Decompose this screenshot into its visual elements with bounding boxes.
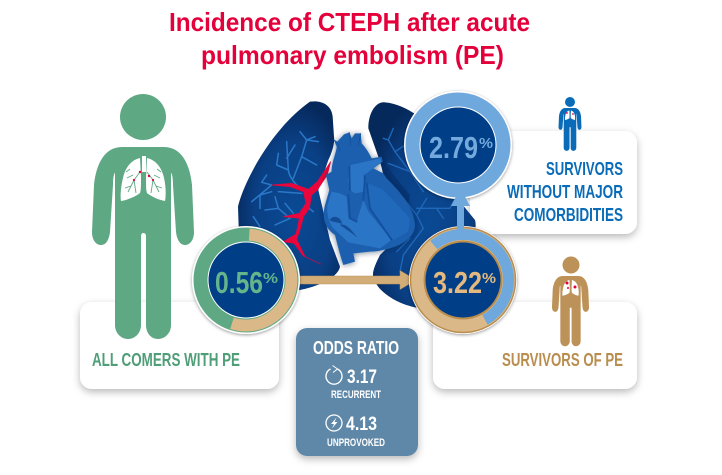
icon: unprovoked (326, 415, 342, 431)
ring: 0.56%: % (263, 270, 278, 287)
arrow: tan, all comers to survivors (296, 270, 416, 290)
panel: odds ratio (296, 328, 418, 456)
red clot vessels (272, 162, 331, 264)
panel: odds ratio: 3.17 (347, 367, 377, 388)
icon: recurrent (326, 366, 342, 384)
ring: 3.22%: % (482, 270, 496, 287)
arrow: blue, survivors to no comorbidities (451, 188, 470, 238)
ring: 0.56%: 0.56 (215, 265, 263, 300)
ring: 3.22% (409, 226, 517, 334)
title: pulmonary embolism (PE) (201, 40, 504, 70)
title (169, 7, 530, 70)
ring: 2.79% (404, 91, 512, 199)
icon: small tan person (552, 256, 589, 346)
title: Incidence of CTEPH after acute (169, 7, 530, 37)
panel: odds ratio: UNPROVOKED (327, 437, 385, 449)
panel: survivors without major comorbidities: WITHOUT MAJOR (507, 182, 623, 202)
ring: 0.56% (192, 226, 300, 334)
panel: odds ratio: RECURRENT (331, 389, 381, 401)
panel: survivors of PE: SURVIVORS OF PE (502, 350, 623, 370)
panel: odds ratio: ODDS RATIO (313, 338, 399, 358)
panel: all comers with PE (80, 302, 279, 389)
icon: large green person with lungs (92, 94, 194, 339)
ring: 2.79%: % (479, 135, 493, 152)
panel: all comers with PE: ALL COMERS WITH PE (92, 350, 240, 370)
panel: survivors of PE (433, 302, 637, 389)
left lung (238, 101, 340, 291)
panel: odds ratio: 4.13 (346, 414, 377, 435)
panel: survivors without major comorbidities: SURVIVORS (546, 159, 623, 179)
left lung vessels (252, 132, 318, 227)
ring: 2.79%: 2.79 (429, 130, 478, 165)
panel: survivors without major comorbidities (470, 131, 637, 234)
illustration: lungs and heart (238, 101, 476, 308)
ring: 3.22%: 3.22 (433, 265, 482, 300)
icon: small blue person (559, 97, 581, 151)
right lung (368, 102, 476, 308)
heart (324, 132, 415, 265)
panel: survivors without major comorbidities: COMORBIDITIES (514, 205, 623, 225)
